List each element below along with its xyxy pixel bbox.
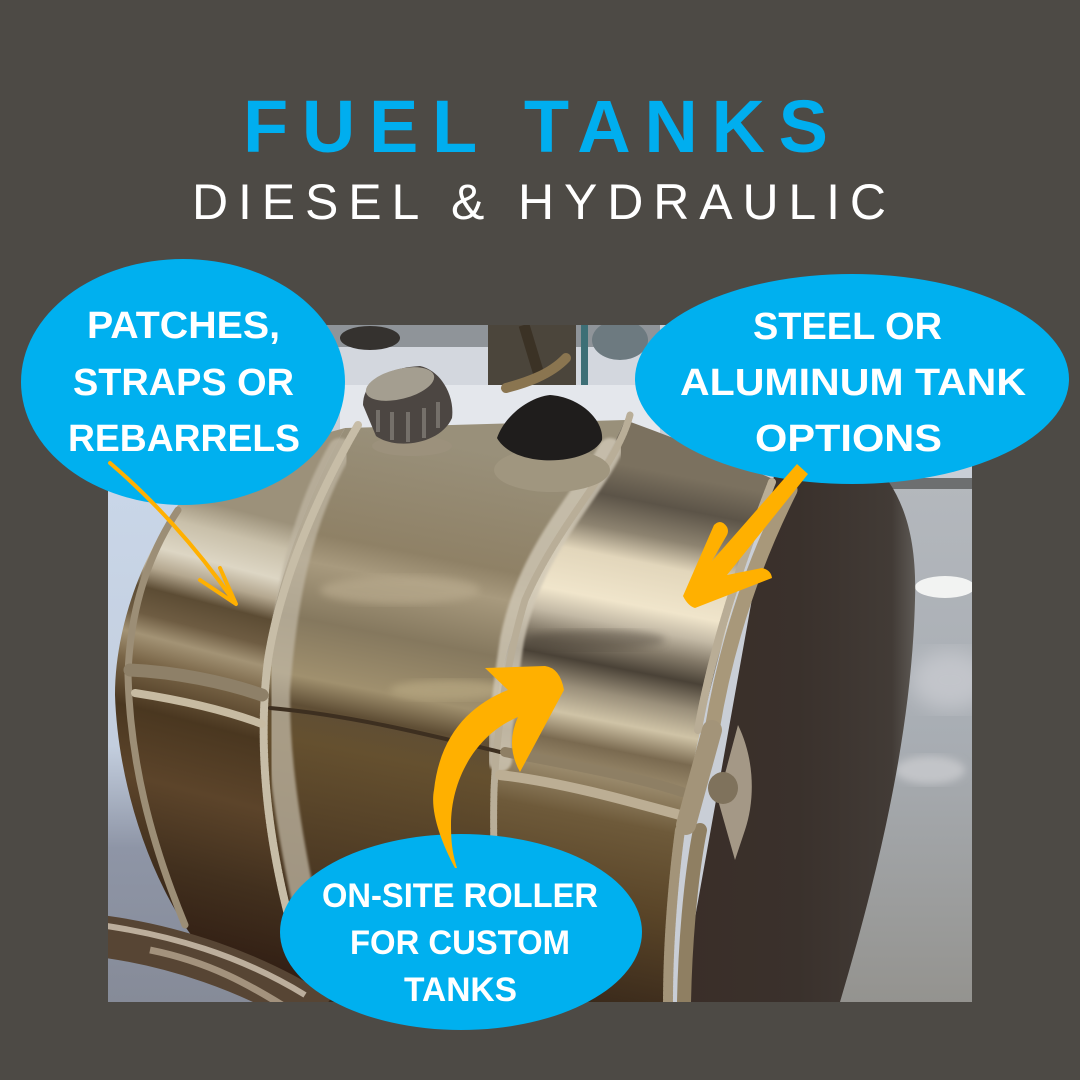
callout: steel or aluminum: STEEL OR <box>753 306 942 348</box>
callout: patches: PATCHES, <box>87 305 280 347</box>
tank left section <box>115 428 345 1002</box>
photo: welded fuel tank <box>100 320 990 1015</box>
callout: on-site roller <box>280 834 642 1030</box>
pipe at lower left <box>100 925 320 1015</box>
callout: on-site roller: ON-SITE ROLLER <box>322 877 598 915</box>
end-cap weld patch <box>708 725 752 860</box>
blurred reflections <box>320 576 665 700</box>
tank middle section <box>262 420 625 1002</box>
tank right section <box>494 420 775 1002</box>
callout: patches: STRAPS OR <box>73 362 294 404</box>
callout: steel or aluminum <box>635 274 1069 484</box>
callout: on-site roller: TANKS <box>404 971 517 1009</box>
arrow: curved, from roller callout <box>433 666 564 868</box>
tank end cap <box>680 470 915 1002</box>
floor and workshop backdrop <box>108 320 990 1002</box>
callout: patches <box>21 259 345 505</box>
subtitle: DIESEL & HYDRAULIC <box>192 174 886 230</box>
callout: steel or aluminum: OPTIONS <box>755 418 942 460</box>
welded straps and seams <box>128 415 790 1002</box>
filler cap: knurled <box>363 366 452 444</box>
callout: patches: REBARRELS <box>68 418 300 460</box>
filler cap: black with wing nut <box>494 325 610 492</box>
arrow: thick, to tank body <box>683 464 808 608</box>
arrow: thin, to strap <box>110 463 236 604</box>
callout: steel or aluminum: ALUMINUM TANK <box>680 362 1027 404</box>
callout: on-site roller: FOR CUSTOM <box>350 924 570 962</box>
title: FUEL TANKS <box>243 85 828 168</box>
